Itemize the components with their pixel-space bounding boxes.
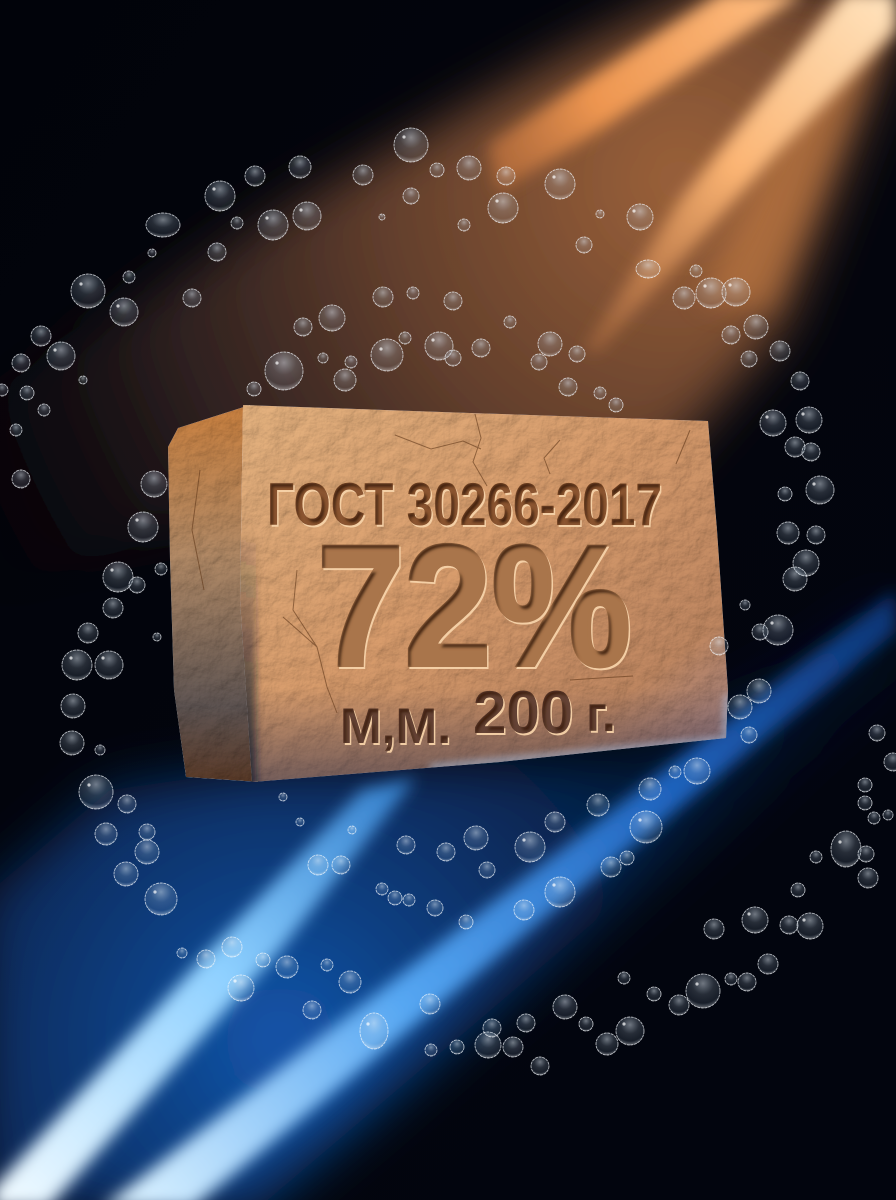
glow: warm haze upper right xyxy=(0,0,896,600)
bubble highlights xyxy=(53,135,842,1026)
soap text: standard number: ГОСТ 30266-2017 xyxy=(267,471,662,538)
beam: orange upper xyxy=(488,0,805,192)
beam: blue left bright xyxy=(0,778,416,1200)
soap: left corner shadow xyxy=(240,530,262,782)
soap: blue rim light xyxy=(430,695,728,768)
soap text: weight: М,М. xyxy=(340,698,451,754)
soap text: weight: 200 xyxy=(473,679,573,746)
soap: cracks xyxy=(192,414,690,713)
beam: orange right wedge xyxy=(700,5,896,310)
soap bar xyxy=(168,405,728,790)
beam: blue lower-right broad xyxy=(102,590,896,1200)
water bubbles ring xyxy=(0,128,896,1075)
beam: orange lower bright xyxy=(584,0,896,352)
soap: left side face xyxy=(168,405,258,782)
soap text: weight: г. xyxy=(586,686,616,742)
soap: bottom blue shade xyxy=(240,405,728,782)
soap text: 72 percent: 72% xyxy=(317,510,631,702)
soap: front face xyxy=(240,405,728,782)
glow: blue haze lower left xyxy=(0,585,896,1200)
